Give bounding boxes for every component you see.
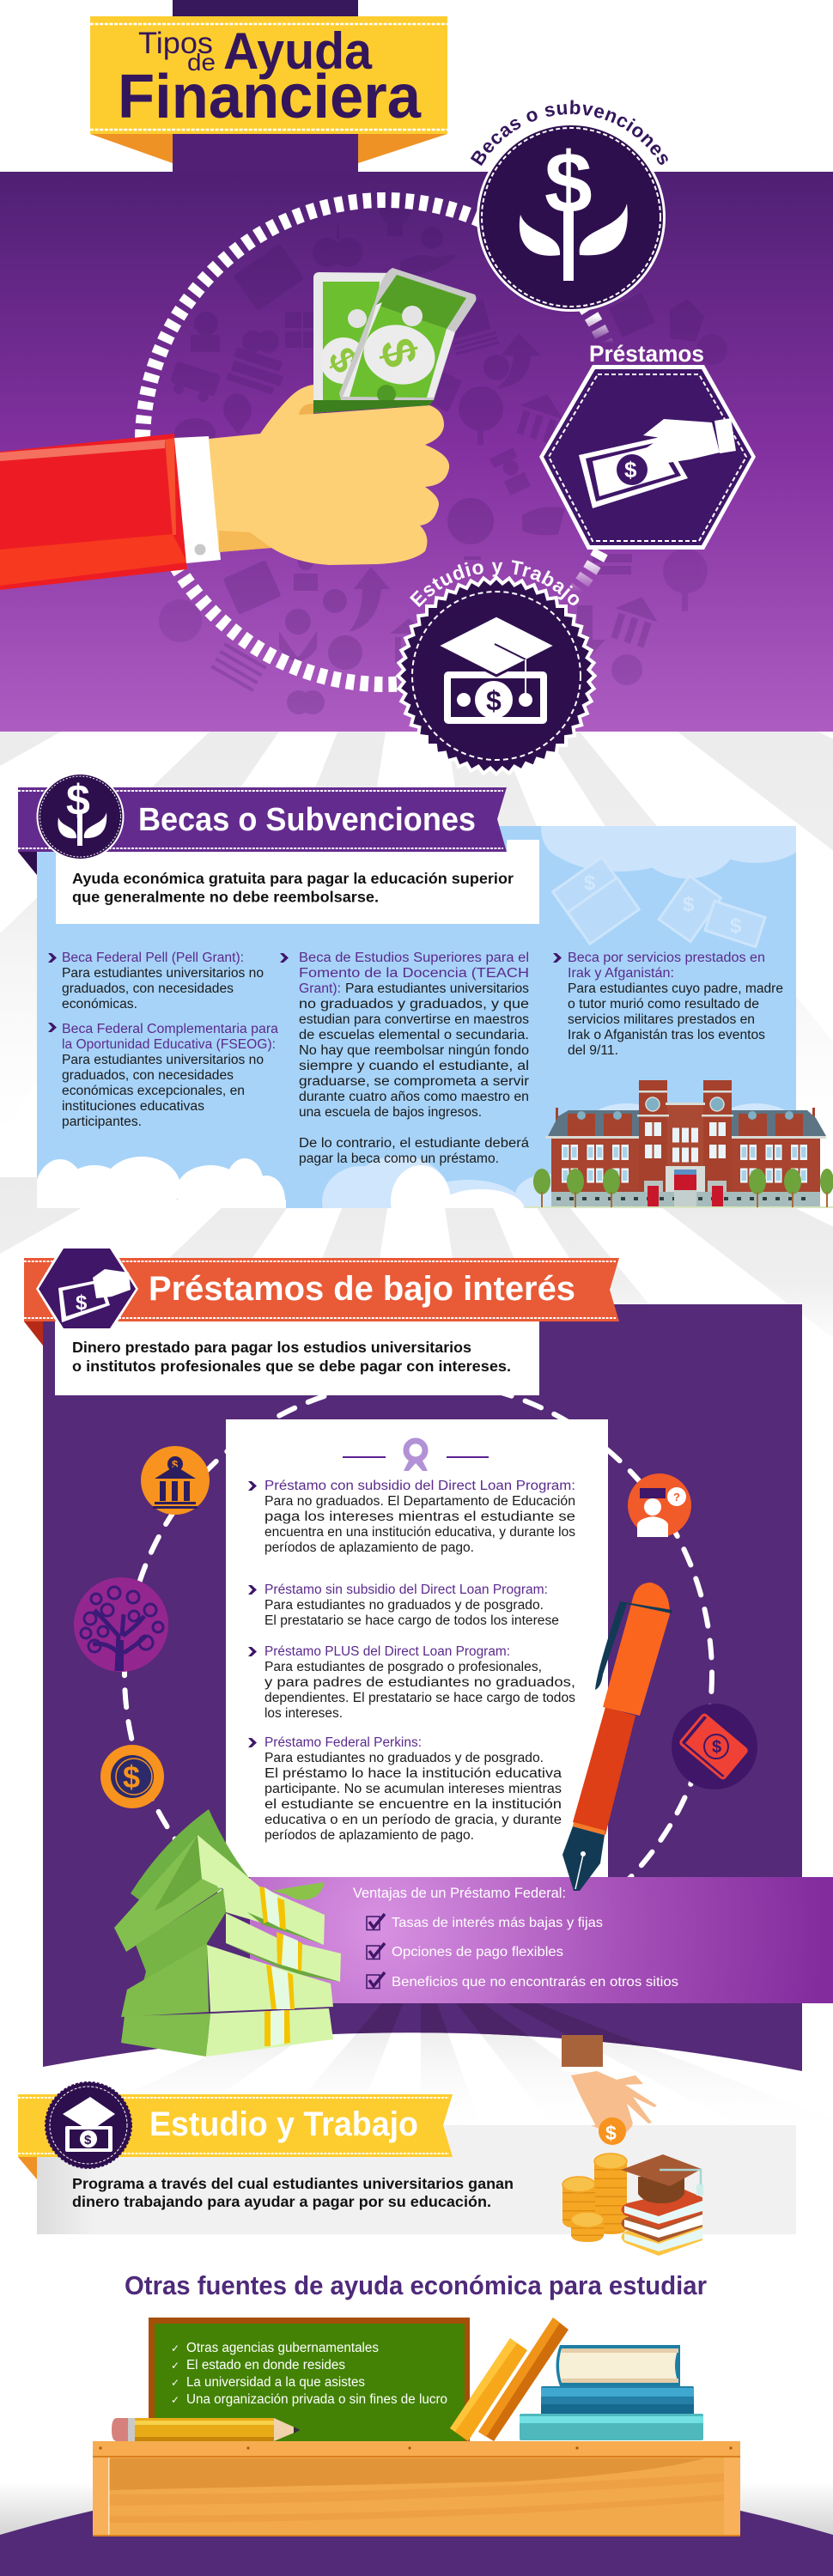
white intro box: prestamos bbox=[55, 1321, 539, 1395]
piggy bbox=[174, 418, 216, 449]
column 1: grants: económicas excepcionales, en bbox=[62, 1084, 245, 1098]
text: loan 1: Préstamo con subsidio del Direct Loan Program: bbox=[264, 1479, 575, 1493]
leaf bbox=[272, 1882, 325, 1900]
icon: money in hand bbox=[579, 418, 736, 508]
column 1: grants: graduados, con necesidades bbox=[62, 981, 234, 996]
column 2: grants: Para estudiantes universitarios bbox=[345, 981, 529, 996]
column 3: grants: servicios militares prestados en bbox=[568, 1012, 755, 1027]
icon: student thinking bbox=[628, 1473, 691, 1537]
band: advantages bbox=[250, 1877, 833, 2003]
hand 2 bbox=[522, 507, 565, 535]
list: El estado en donde resides bbox=[186, 2358, 345, 2372]
white intro box: becas: que generalmente no debe reembolsarse. bbox=[72, 888, 379, 905]
person bbox=[294, 555, 318, 591]
text: loan 3 bbox=[248, 1644, 575, 1721]
text: loan 3: Para estudiantes de posgrado o profesionales, bbox=[264, 1660, 542, 1674]
title: Becas o Subvenciones bbox=[138, 802, 476, 838]
hands coin bbox=[279, 609, 317, 662]
list: ✓ bbox=[171, 2342, 179, 2354]
text: loan 1: Para no graduados. El Departamento de Educación bbox=[264, 1494, 575, 1509]
text: estudio: Programa a través del cual estudiantes universitarios ganan bbox=[72, 2175, 514, 2192]
hero background bbox=[0, 0, 833, 732]
ghost dollars: $ bbox=[584, 872, 596, 895]
text: estudio bbox=[72, 2175, 514, 2210]
hero faint icons bbox=[159, 195, 727, 714]
list: ✓ bbox=[171, 2394, 179, 2406]
title: Estudio y Trabajo bbox=[149, 2105, 418, 2143]
money bills: $ bbox=[319, 341, 367, 380]
icon: graduation cap and bill bbox=[437, 616, 556, 724]
pencil bbox=[112, 2418, 301, 2441]
icon: coin: $ bbox=[123, 1759, 140, 1795]
column 2: grants: De lo contrario, el estudiante deberá bbox=[299, 1136, 529, 1151]
column 2: grants: una escuela de bajos ingresos. bbox=[299, 1105, 482, 1120]
column 2: grants: graduarse, se comprometa a servir bbox=[299, 1074, 529, 1089]
text: loan 1: encuentra en una institución educativa, y durante los bbox=[264, 1525, 575, 1540]
title banner bbox=[90, 16, 447, 163]
papers bbox=[444, 298, 499, 355]
column 1: grants: Para estudiantes universitarios no bbox=[62, 1053, 264, 1067]
text: loan 4: Para estudiantes no graduados y de posgrado. bbox=[264, 1751, 544, 1765]
books bbox=[227, 347, 288, 396]
badge: estudio y trabajo bbox=[395, 560, 598, 776]
text: loan 1 bbox=[248, 1479, 575, 1555]
book red bbox=[621, 2190, 702, 2228]
banner: prestamos bbox=[24, 1258, 619, 1346]
title text: Tipos bbox=[138, 27, 213, 60]
calculator bbox=[285, 312, 319, 348]
icon: money tree bbox=[74, 1577, 168, 1672]
cap base bbox=[638, 2177, 684, 2203]
book brown bbox=[621, 2203, 702, 2242]
banner: estudio bbox=[18, 2094, 453, 2179]
clouds top right bbox=[541, 826, 796, 878]
icon: money in hand: $ bbox=[624, 457, 637, 483]
bottom stack bbox=[121, 2014, 210, 2057]
white intro box: becas: Ayuda económica gratuita para pagar la educación superior bbox=[72, 870, 514, 887]
recycle bbox=[328, 635, 362, 670]
window glass bbox=[563, 1152, 808, 1176]
lower dark rays bbox=[356, 2003, 648, 2047]
badge small: prestamos: $ bbox=[76, 1291, 88, 1315]
white intro box: prestamos: o institutos profesionales que se debe pagar con intereses. bbox=[72, 1358, 511, 1375]
badge small: prestamos bbox=[36, 1246, 138, 1331]
column 2: grants: estudian para convertirse en maestros bbox=[299, 1012, 529, 1027]
band: advantages: Ventajas de un Préstamo Federal: bbox=[353, 1886, 566, 1901]
student bbox=[191, 312, 220, 352]
money bills bbox=[313, 268, 476, 413]
hero dashed ring bbox=[143, 200, 627, 684]
curved label: Becas o subvenciones bbox=[471, 100, 668, 167]
lines bbox=[210, 642, 267, 692]
tree right bbox=[663, 549, 708, 611]
column 2: grants: Fomento de la Docencia (TEACH bbox=[299, 966, 529, 981]
arrow coin 2 bbox=[323, 567, 390, 632]
column 1: grants: económicas. bbox=[62, 997, 137, 1012]
arm hand lower: $ bbox=[605, 2122, 617, 2144]
item 2: Opciones de pago flexibles bbox=[392, 1945, 563, 1959]
second stack bbox=[136, 1889, 226, 1988]
badge: becas o subvenciones bbox=[471, 100, 668, 312]
column 2: grants: no graduados y graduados, y que bbox=[299, 997, 529, 1012]
doc bbox=[428, 372, 462, 412]
top stack bbox=[114, 1835, 222, 1952]
text: loan 4: participante. No se acumulan intereses mientras bbox=[264, 1782, 562, 1796]
column 2: grants bbox=[280, 951, 529, 1166]
bill 2 bbox=[223, 560, 282, 615]
badge small: estudio: $ bbox=[84, 2133, 92, 2148]
upper right icons bbox=[609, 293, 655, 337]
list: Una organización privada o sin fines de lucro bbox=[186, 2392, 447, 2407]
tree bbox=[459, 386, 503, 445]
icon: graduation cap and bill: $ bbox=[486, 685, 502, 716]
icon: arm dropping coin bbox=[562, 2035, 657, 2145]
text: loan 4: El préstamo lo hace la institución educativa bbox=[264, 1766, 562, 1781]
badge: prestamos bbox=[539, 365, 756, 550]
text: loan 4: educativa o en un período de gracia, y durante bbox=[264, 1813, 562, 1827]
icon: bill circle: $ bbox=[712, 1738, 721, 1757]
icon: ribbon medal bbox=[343, 1441, 489, 1471]
title text: Financiera bbox=[118, 63, 422, 131]
arrow coin bbox=[483, 333, 541, 388]
column 2: grants: Beca de Estudios Superiores para el bbox=[299, 951, 529, 965]
student 2 bbox=[489, 448, 531, 497]
icon: bill circle bbox=[672, 1704, 757, 1789]
icon: coins bbox=[562, 2154, 627, 2242]
column 2: grants: siempre y cuando el estudiante, al bbox=[299, 1059, 529, 1073]
text: loan 2 bbox=[248, 1583, 559, 1628]
text: loan 4: el estudiante se encuentre en la institución bbox=[264, 1797, 562, 1812]
icon: bank bbox=[141, 1446, 210, 1515]
column 1: grants: Para estudiantes universitarios no bbox=[62, 966, 264, 981]
hand bbox=[399, 254, 455, 275]
background rays middle bbox=[0, 1177, 833, 1315]
text: loan 2: El prestatario se hace cargo de todos los interese bbox=[264, 1613, 559, 1628]
apple 3 bbox=[287, 690, 325, 714]
bank 2 bbox=[390, 618, 428, 663]
text: loan 1: períodos de aplazamiento de pago. bbox=[264, 1540, 474, 1555]
icon: coin bbox=[100, 1745, 164, 1808]
bank bbox=[512, 387, 569, 446]
list: ✓ bbox=[171, 2377, 179, 2389]
text: loan 3: Préstamo PLUS del Direct Loan Program: bbox=[264, 1644, 510, 1659]
badge small: estudio bbox=[46, 2082, 131, 2168]
arm and fist bbox=[0, 385, 449, 590]
text: loan 4 bbox=[248, 1735, 562, 1843]
column 1: grants: participantes. bbox=[62, 1115, 142, 1129]
title: Préstamos de bajo interés bbox=[149, 1270, 575, 1308]
column 3: grants: Irak y Afganistán: bbox=[568, 966, 674, 981]
column 2: grants: Grant): bbox=[299, 981, 341, 996]
books right bbox=[593, 554, 632, 574]
curved label: Estudio y Trabajo bbox=[410, 560, 579, 608]
badge small: becas bbox=[36, 773, 124, 860]
white intro box: prestamos: Dinero prestado para pagar los estudios universitarios bbox=[72, 1339, 471, 1356]
white box: loans bbox=[226, 1419, 608, 1877]
column 2: grants: de escuelas elemental o secundaria. bbox=[299, 1028, 529, 1042]
big dashed circle bbox=[125, 1381, 712, 1968]
icon: bank: $ bbox=[172, 1458, 179, 1471]
column 3: grants bbox=[553, 951, 783, 1058]
column 1: grants: Beca Federal Pell (Pell Grant): bbox=[62, 951, 244, 965]
list: ✓ bbox=[171, 2360, 179, 2372]
column 2: grants: pagar la beca como un préstamo. bbox=[299, 1151, 499, 1166]
icon: student thinking: ? bbox=[673, 1491, 680, 1504]
purple floor bbox=[0, 2474, 833, 2576]
text: loan 2: Préstamo sin subsidio del Direct Loan Program: bbox=[264, 1583, 548, 1597]
column 1: grants: Beca Federal Complementaria para bbox=[62, 1022, 278, 1036]
title text: de bbox=[187, 49, 216, 76]
trees bbox=[533, 1169, 833, 1194]
icon: dollar plant: $ bbox=[544, 135, 593, 231]
column 2: grants: No hay que reembolsar ningún fondo bbox=[299, 1043, 529, 1058]
text: loan 1: paga los intereses mientras el estudiante se bbox=[264, 1510, 575, 1524]
text: loan 4: períodos de aplazamiento de pago. bbox=[264, 1828, 474, 1843]
icon: books and cap bbox=[621, 2154, 703, 2256]
chalkboard bbox=[149, 2318, 470, 2441]
column 3: grants: o tutor murió como resultado de bbox=[568, 997, 759, 1012]
bill bbox=[234, 244, 304, 311]
column 3: grants: Para estudiantes cuyo padre, madre bbox=[568, 981, 783, 996]
list: Otras agencias gubernamentales bbox=[186, 2341, 379, 2355]
building bbox=[526, 1080, 833, 1208]
desk bbox=[93, 2441, 740, 2537]
column 1: grants: graduados, con necesidades bbox=[62, 1068, 234, 1083]
bank right bbox=[606, 590, 663, 650]
ghost dollars: $ bbox=[683, 893, 695, 916]
column 3: grants: Beca por servicios prestados en bbox=[568, 951, 765, 965]
text: loan 3: dependientes. El prestatario se hace cargo de todos bbox=[264, 1691, 575, 1705]
book yellow bbox=[621, 2217, 702, 2256]
leaning books bbox=[450, 2318, 569, 2441]
cap board bbox=[621, 2154, 702, 2186]
back bill bbox=[131, 1809, 249, 1906]
ghost dollars bbox=[584, 872, 742, 938]
column 1: grants bbox=[48, 951, 278, 1129]
text: loan 4: Préstamo Federal Perkins: bbox=[264, 1735, 422, 1750]
floor gradient bbox=[0, 2482, 833, 2537]
white intro box: becas bbox=[56, 840, 539, 924]
stacked books bbox=[520, 2345, 703, 2440]
arm hand lower bbox=[591, 2117, 633, 2145]
label: prestamos: Préstamos bbox=[589, 341, 704, 367]
bus bbox=[167, 361, 221, 404]
column 3: grants: del 9/11. bbox=[568, 1043, 618, 1058]
money stack bbox=[114, 1809, 341, 2057]
windows bbox=[562, 1129, 810, 1176]
list bbox=[171, 2341, 447, 2407]
title text: Ayuda bbox=[223, 22, 373, 80]
text: loan 3: los intereses. bbox=[264, 1706, 343, 1721]
background rays lower bbox=[192, 2033, 690, 2064]
badge small: becas: $ bbox=[66, 776, 90, 824]
icon: dollar plant bbox=[520, 135, 628, 281]
text: estudio: dinero trabajando para ayudar a pagar por su educación. bbox=[72, 2193, 491, 2210]
panel: prestamos bbox=[43, 1304, 802, 2071]
money bills: $ bbox=[369, 332, 429, 373]
coin right bbox=[611, 654, 642, 685]
title text bbox=[118, 22, 422, 131]
ghost dollars: $ bbox=[730, 914, 742, 938]
item 1: Tasas de interés más bajas y fijas bbox=[392, 1916, 603, 1930]
third stack bbox=[121, 1943, 209, 2017]
apple bbox=[313, 225, 362, 267]
text: loan 2: Para estudiantes no graduados y de posgrado. bbox=[264, 1598, 544, 1613]
lightbulb bbox=[380, 195, 410, 236]
globe 2 bbox=[159, 599, 202, 642]
ghost money stacks bbox=[553, 857, 765, 947]
text: loan 3: y para padres de estudiantes no graduados, bbox=[264, 1675, 575, 1690]
heading: other sources: Otras fuentes de ayuda económica para estudiar bbox=[125, 2270, 707, 2300]
clouds bottom bbox=[37, 1103, 785, 1208]
column 3: grants: Irak o Afganistán tras los eventos bbox=[568, 1028, 765, 1042]
background rays upper bbox=[0, 732, 833, 987]
pen bbox=[562, 1583, 672, 1891]
item 3: Beneficios que no encontrarás en otros sitios bbox=[392, 1975, 678, 1990]
coin bbox=[421, 227, 443, 249]
bulb coin bbox=[223, 393, 252, 434]
panel: becas bbox=[37, 826, 796, 1208]
globe bbox=[447, 498, 494, 560]
column 2: grants: durante cuatro años como maestro en bbox=[299, 1090, 529, 1104]
column 1: grants: la Oportunidad Educativa (FSEOG): bbox=[62, 1037, 276, 1052]
column 1: grants: instituciones educativas bbox=[62, 1099, 204, 1114]
icon: arm dropping coin: $ bbox=[605, 2122, 617, 2144]
list: La universidad a la que asistes bbox=[186, 2375, 365, 2390]
panel: estudio bbox=[37, 2123, 796, 2234]
arrow down bbox=[567, 605, 605, 663]
apple 2 bbox=[242, 331, 279, 353]
banner: becas bbox=[18, 787, 507, 875]
